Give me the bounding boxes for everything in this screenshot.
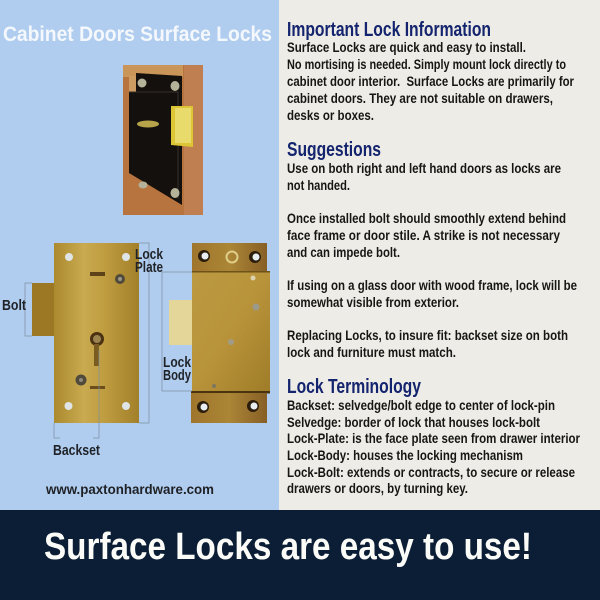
panel: right text background — [279, 0, 600, 510]
label: bolt: Bolt — [2, 297, 26, 314]
photo: lock plate front view — [32, 243, 139, 423]
text block: important lock information: cabinet doors. They are not suitable on drawers, — [287, 90, 553, 106]
top flange — [192, 243, 267, 272]
text block: lock terminology: Lock-Body: houses the locking mechanism — [287, 447, 523, 463]
bottom banner — [0, 510, 600, 600]
bottom flange — [191, 393, 267, 423]
text block: lock terminology — [287, 397, 580, 496]
text block: important lock information — [287, 39, 574, 123]
keyhole — [90, 332, 104, 346]
title: Cabinet Doors Surface Locks — [3, 23, 272, 46]
text block: suggestions — [287, 160, 577, 360]
banner slogan: Surface Locks are easy to use! — [44, 526, 532, 568]
panel: left blue background — [0, 0, 279, 510]
pale bolt — [169, 300, 192, 345]
heading: important lock information: Important Lock Information — [287, 19, 491, 41]
text block: suggestions: and can impede bolt. — [287, 244, 400, 260]
label: lock body: Lock — [163, 354, 192, 371]
text block: suggestions: somewhat visible from exterior. — [287, 294, 459, 310]
text block: lock terminology: Selvedge: border of lock that houses lock-bolt — [287, 414, 540, 430]
bolt — [32, 283, 54, 336]
dimension lines — [25, 243, 192, 438]
heading: suggestions: Suggestions — [287, 139, 381, 161]
lock plate — [54, 243, 139, 423]
label: backset: Backset — [53, 442, 100, 459]
photo: lock body rear view — [169, 243, 270, 423]
label: lock plate — [135, 246, 164, 276]
website url: www.paxtonhardware.com — [45, 481, 214, 497]
text block: suggestions: lock and furniture must match. — [287, 344, 456, 360]
body — [192, 272, 270, 392]
label: lock body — [163, 354, 192, 384]
photo: lock installed on cabinet door — [123, 65, 203, 215]
text block: lock terminology: drawers or doors, by turning key. — [287, 480, 468, 496]
text block: suggestions: not handed. — [287, 177, 350, 193]
text block: important lock information: Surface Locks are quick and easy to install. — [287, 39, 526, 55]
label: lock plate: Plate — [135, 259, 163, 276]
text block: important lock information: desks or boxes. — [287, 107, 374, 123]
label: lock plate: Lock — [135, 246, 164, 263]
label: lock body: Body — [163, 367, 191, 384]
heading: lock terminology: Lock Terminology — [287, 376, 422, 398]
